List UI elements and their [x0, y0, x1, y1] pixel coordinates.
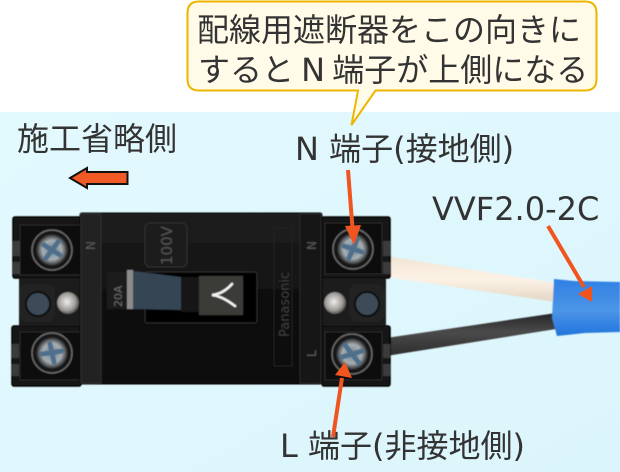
right side strip	[300, 214, 321, 383]
rating plate 100V: 100V	[158, 225, 176, 265]
circuit breaker	[12, 213, 390, 386]
blue sheath	[552, 279, 620, 336]
arrow: to cable	[548, 226, 592, 302]
mounting section: left	[19, 278, 81, 326]
label: cable: VVF2.0-2C	[432, 190, 599, 228]
side letter N left: N	[84, 241, 98, 250]
screw	[333, 229, 373, 269]
photo background	[0, 112, 620, 472]
20A label	[107, 272, 128, 309]
arrow: to N terminal	[345, 170, 361, 245]
terminal block: bottom left	[12, 326, 81, 386]
breaker body	[80, 213, 322, 384]
mounting section: right	[322, 278, 386, 326]
callout	[188, 2, 596, 125]
switch handle	[107, 270, 199, 312]
screw	[32, 333, 72, 373]
terminal block: top left	[13, 217, 81, 278]
switch label block	[199, 276, 243, 315]
switch recess	[145, 272, 257, 323]
screw	[32, 230, 72, 270]
white neutral wire	[386, 256, 556, 302]
black wire	[386, 313, 556, 356]
terminal block: top right	[322, 217, 390, 278]
rating plate 100V	[145, 223, 187, 267]
arrow: left direction	[70, 168, 128, 188]
callout text line 2: すると N 端子が上側になる	[198, 51, 588, 89]
label: 施工省略側: 施工省略側	[17, 120, 177, 158]
Panasonic logo text	[274, 228, 293, 366]
label: N terminal: N 端子(接地側)	[295, 130, 514, 168]
terminal block: bottom right	[322, 326, 390, 386]
screw	[332, 334, 372, 374]
callout text line 1: 配線用遮断器をこの向きに	[197, 11, 581, 49]
left side strip	[81, 214, 101, 383]
Panasonic logo text: Panasonic	[278, 272, 293, 337]
side letter L right: L	[305, 350, 319, 357]
label: L terminal: L 端子(非接地側)	[280, 427, 525, 465]
cable: VVF2.0-2C	[386, 256, 620, 356]
switch handle: 20A	[112, 285, 125, 307]
side letter N right: N	[305, 241, 319, 250]
arrow: to L terminal	[333, 362, 352, 437]
